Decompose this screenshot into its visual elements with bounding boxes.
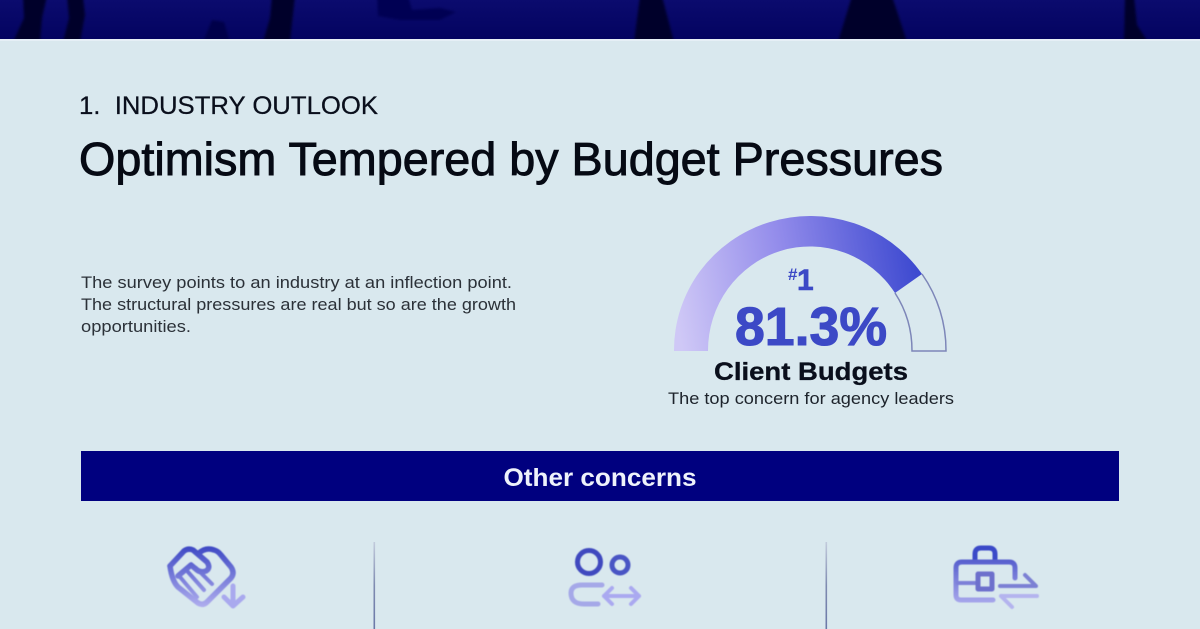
header photo band [0, 0, 1200, 42]
section label: 1. INDUSTRY OUTLOOK [79, 92, 378, 120]
gauge track [895, 274, 946, 351]
gauge caption: The top concern for agency leaders [668, 389, 954, 408]
gauge fill 81.3% [674, 216, 922, 351]
intro paragraph: The structural pressures are real but so are the growth [81, 295, 516, 314]
intro paragraph: The survey points to an industry at an inflection point. [81, 273, 512, 292]
divider right [826, 542, 827, 629]
rank: 1 [797, 264, 814, 297]
gauge label: Client Budgets [714, 358, 908, 386]
intro paragraph [81, 273, 516, 336]
title: Optimism Tempered by Budget Pressures [79, 133, 943, 185]
rank [788, 264, 814, 297]
percentage: 81.3% [735, 297, 887, 357]
icon: people with swap arrows [571, 550, 639, 604]
divider left [374, 542, 375, 629]
rank: # [788, 265, 798, 284]
intro paragraph: opportunities. [81, 317, 191, 336]
banner: other concerns: Other concerns [504, 464, 696, 492]
banner: other concerns [81, 451, 1119, 501]
gauge: client budgets [668, 216, 954, 408]
icon: briefcase with transfer arrows [956, 548, 1037, 607]
icon: handshake with down arrow [170, 549, 243, 606]
